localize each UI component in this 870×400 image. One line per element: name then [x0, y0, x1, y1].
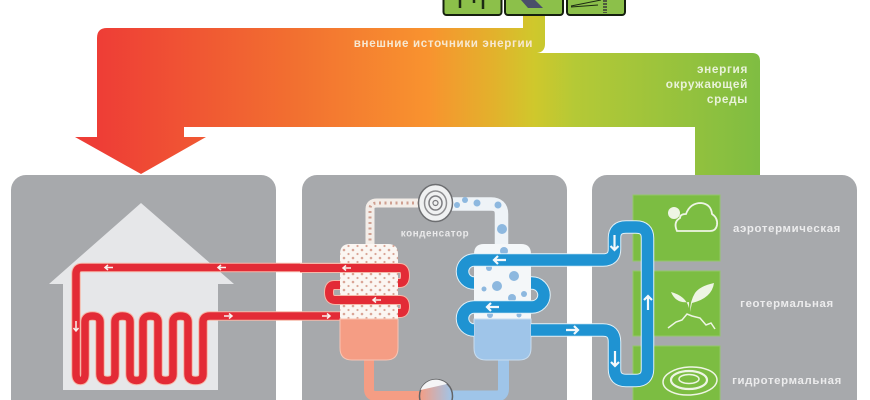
icons: external energy sources: [444, 0, 625, 15]
liquid line, cool: [447, 358, 504, 396]
label: ambient energy: энергия: [697, 62, 748, 76]
liquid line, warm: [369, 358, 424, 396]
red coil on condenser: [300, 268, 405, 313]
panel: ground source: [633, 271, 720, 336]
vapor pipe, warm side: [370, 203, 420, 246]
panel: air source: [633, 195, 720, 261]
energy flow arrow: [75, 15, 760, 175]
arrows on condenser coil: [322, 266, 381, 318]
panel: ambient sources: [592, 175, 857, 400]
panel: heat pump: [302, 175, 567, 400]
panel: water source: [633, 346, 720, 400]
blue circuit outline: [462, 227, 648, 380]
label: external energy: внешние источники энергии: [354, 37, 533, 50]
icon: wind turbines: [444, 0, 502, 15]
panel: house: [11, 175, 276, 400]
icon: water ripples: [662, 366, 718, 396]
icon: sprout: [668, 283, 715, 329]
label: aerothermal: аэротермическая: [733, 223, 841, 235]
vapor bubbles: [454, 197, 507, 234]
icon: cloud and sun: [668, 203, 717, 231]
condenser fan: [418, 184, 452, 222]
underfloor heating pipe: [76, 268, 340, 380]
label: condenser: конденсатор: [401, 228, 469, 240]
label: ambient energy: окружающей: [666, 77, 748, 91]
icon: solar panel: [505, 0, 563, 15]
icon: pylon: [567, 0, 625, 15]
arrows on house pipe: [74, 265, 232, 331]
condenser tank: [340, 244, 398, 360]
vapor pipe, cool side: [450, 204, 502, 246]
label: geothermal: геотермальная: [740, 298, 834, 310]
house: [49, 203, 234, 390]
arrows on blue circuit: [487, 235, 652, 366]
blue circuit core: [462, 227, 648, 380]
evaporator tank: [474, 244, 531, 360]
compressor: [420, 380, 452, 400]
label: ambient energy: среды: [707, 92, 748, 106]
label: hydrothermal: гидротермальная: [732, 375, 842, 387]
